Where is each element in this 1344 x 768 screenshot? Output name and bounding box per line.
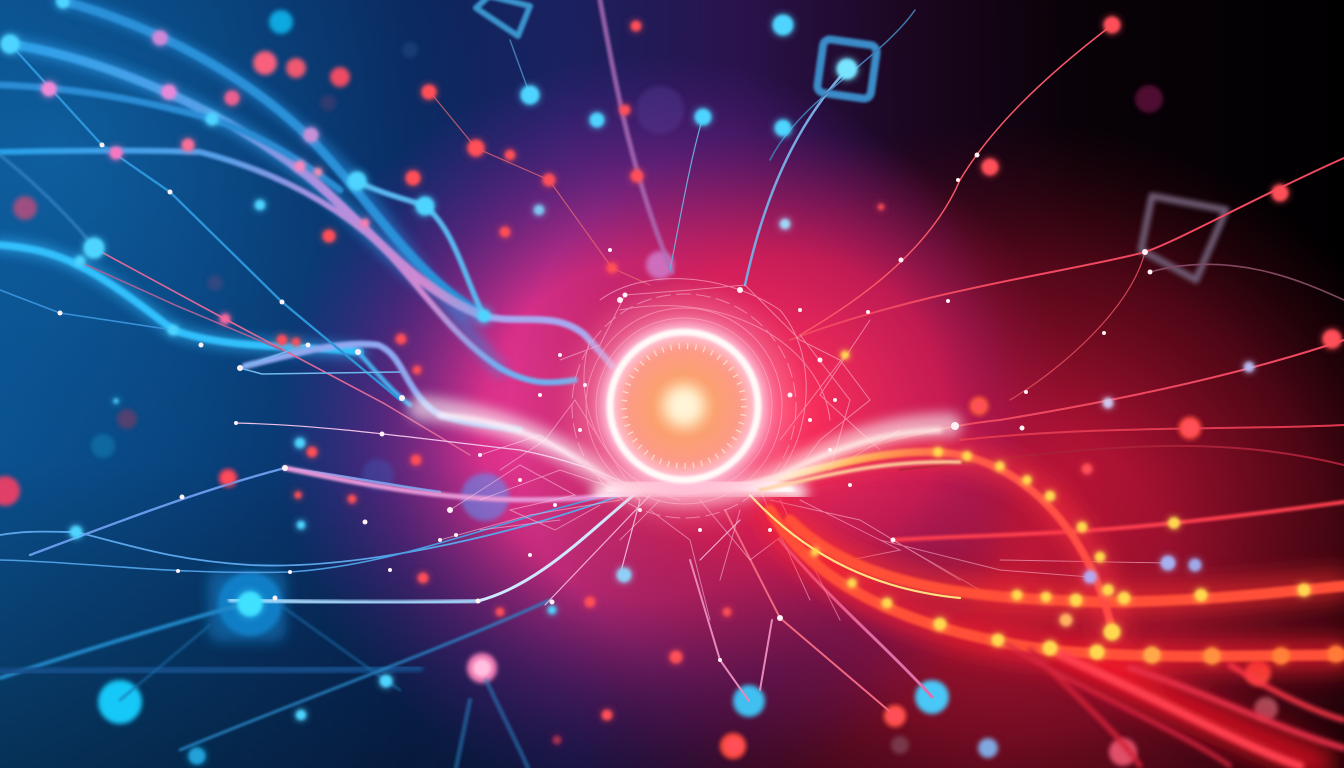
ring tick marks (624, 346, 744, 466)
central glowing ring (574, 296, 794, 516)
blue and pink streams, left side (0, 0, 640, 768)
ring core (612, 334, 756, 478)
decorative diamond frames (208, 0, 1226, 642)
icon: glowing diamond (817, 39, 877, 99)
fine filaments radiating from the core (430, 0, 1344, 716)
network nodes: amber string along hot streams (811, 351, 1344, 664)
ring stroke (610, 332, 758, 480)
icon: glowing square lower left (208, 570, 286, 642)
ring halo (609, 331, 759, 481)
bright white stream through the core (420, 408, 960, 494)
network nodes: small white junctions (58, 142, 1152, 662)
icon: faded diamond right (1141, 196, 1226, 280)
fine web around the core (440, 279, 1168, 620)
hot streams, lower right (745, 451, 1344, 766)
icon: blue diamond top (476, 0, 530, 36)
